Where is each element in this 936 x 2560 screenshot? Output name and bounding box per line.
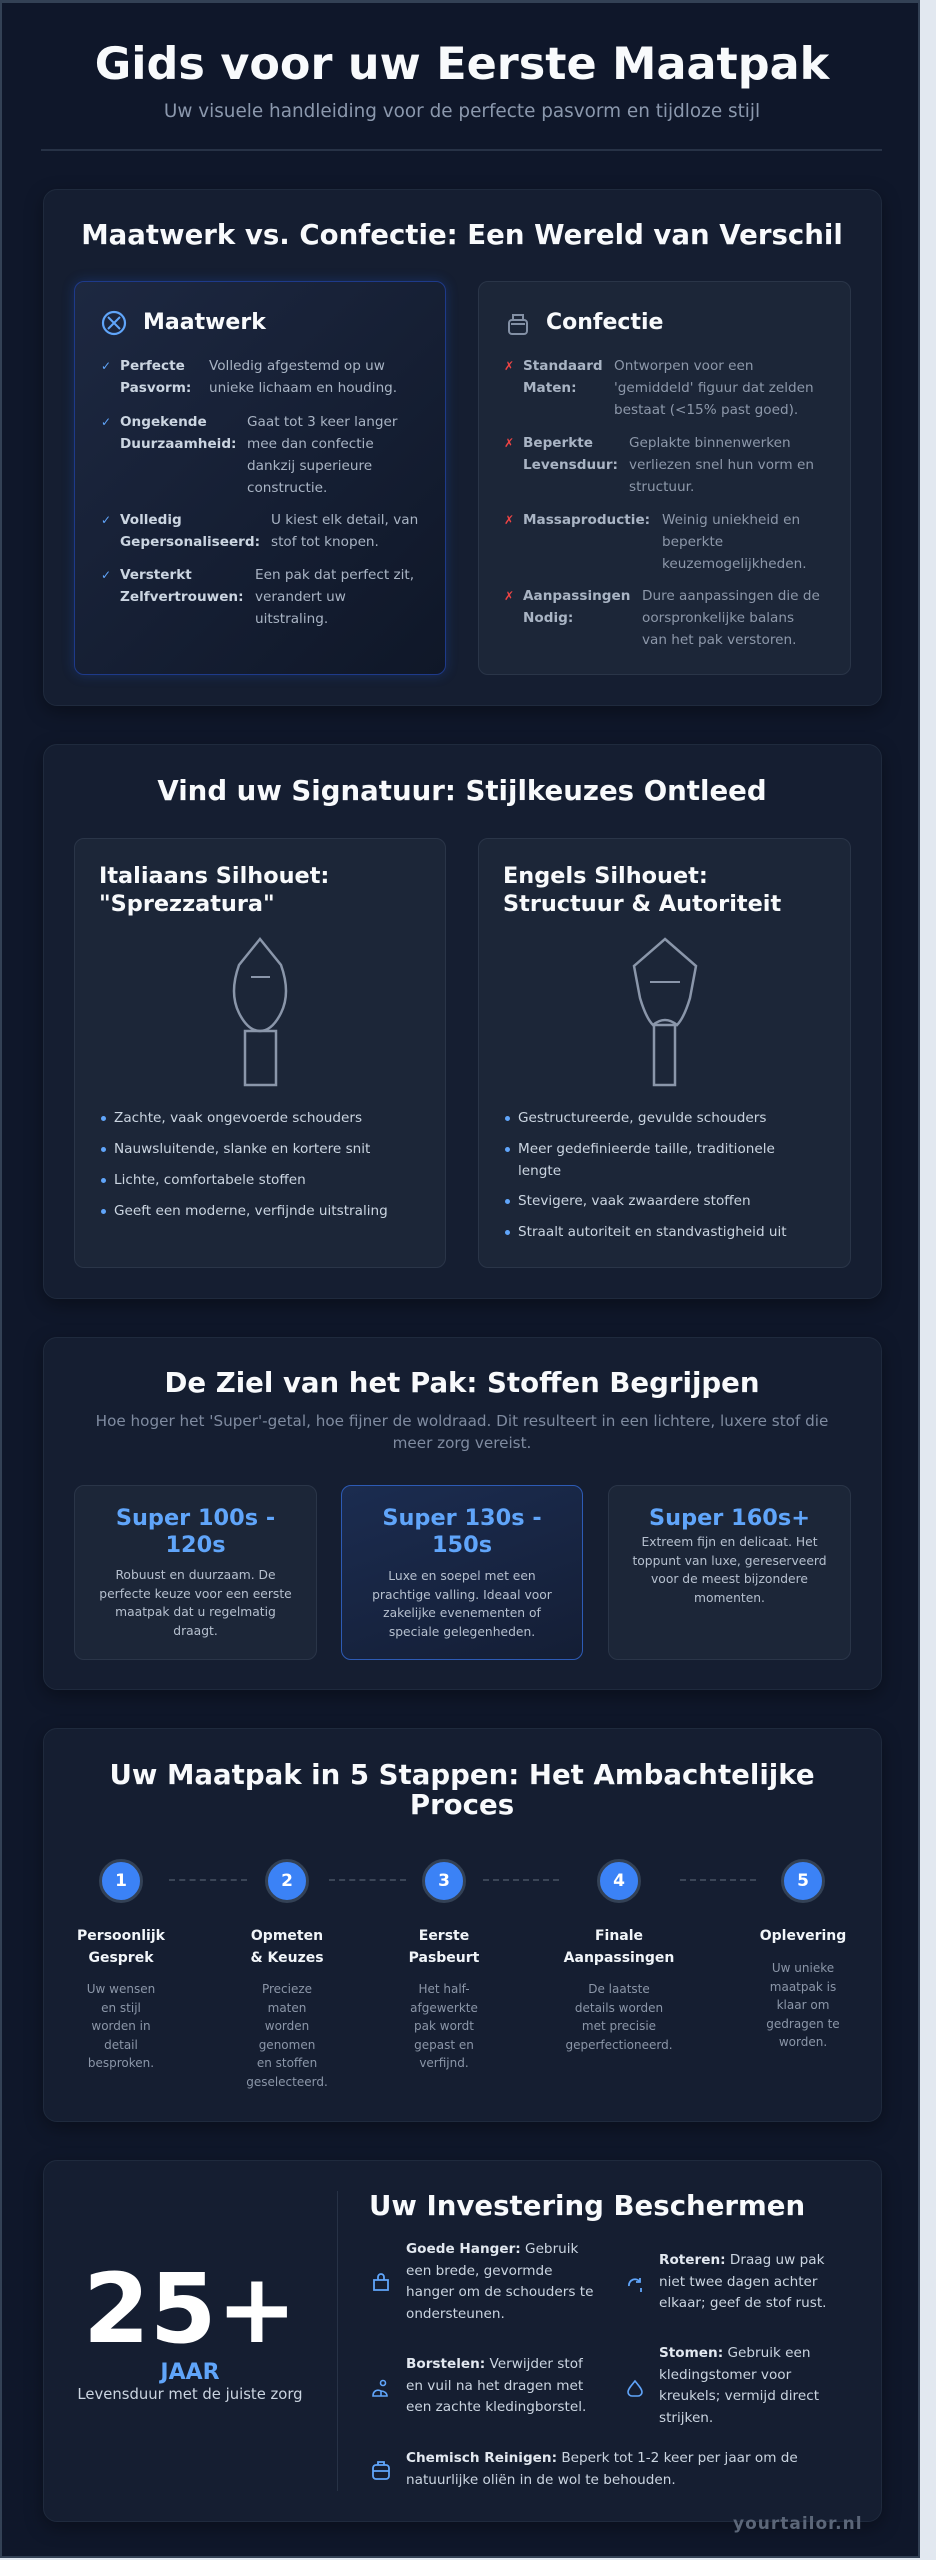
step 5: worden. xyxy=(779,2035,827,2049)
step 2: worden xyxy=(265,2019,309,2033)
card: super 100s-120s: 120s xyxy=(165,1532,226,1558)
card: super 100s-120s: maatpak dat u regelmatig xyxy=(115,1605,276,1619)
list: italiaans traits: Nauwsluitende, slanke en kortere snit xyxy=(114,1141,370,1157)
step 3: verfijnd. xyxy=(419,2056,469,2070)
list: confectie drawbacks: Standaard xyxy=(523,358,603,374)
list: maatwerk benefits: Pasvorm: xyxy=(120,380,191,396)
card: super 130s-150s (highlighted): Super 130s - xyxy=(382,1505,542,1531)
heading: 5 stappen: Uw Maatpak in 5 Stappen: Het Ambachtelijke xyxy=(109,1758,815,1791)
card: super 160s+: toppunt van luxe, gereserveerd xyxy=(632,1554,827,1568)
care: stomen: kledingstomer voor xyxy=(659,2366,791,2382)
care: goede hanger: ondersteunen. xyxy=(406,2306,505,2322)
list: engels traits: lengte xyxy=(518,1163,561,1179)
step 5: 5 xyxy=(797,1871,809,1891)
step 1: detail xyxy=(104,2038,138,2052)
list: confectie drawbacks: keuzemogelijkheden. xyxy=(662,556,807,572)
list: confectie drawbacks: Aanpassingen xyxy=(523,588,630,604)
step 3 xyxy=(409,1859,479,2070)
list: maatwerk benefits: Perfecte xyxy=(120,358,185,374)
icon: confectie box xyxy=(508,314,528,335)
care: roteren: Roteren: Draag uw pak xyxy=(659,2252,824,2268)
card heading: confectie: Confectie xyxy=(546,310,663,335)
icon: needle circle xyxy=(102,310,126,336)
card: super 160s+: momenten. xyxy=(694,1590,765,1604)
step 5 xyxy=(760,1859,846,2049)
list: maatwerk benefits: Duurzaamheid: xyxy=(120,436,236,452)
list: maatwerk benefits: U kiest elk detail, van xyxy=(271,512,418,528)
list: maatwerk benefits: Ongekende xyxy=(120,414,207,430)
step 3: 3 xyxy=(438,1871,450,1891)
card: super 100s-120s xyxy=(74,1485,317,1660)
list: confectie drawbacks: ✗ xyxy=(504,513,514,527)
care: goede hanger: een brede, gevormde xyxy=(406,2262,553,2278)
list: confectie drawbacks: oorspronkelijke balans xyxy=(642,610,794,626)
care: stomen: strijken. xyxy=(659,2410,713,2426)
step 5: Oplevering xyxy=(760,1928,846,1944)
list: maatwerk benefits: ✓ xyxy=(101,415,111,429)
list: confectie drawbacks: verliezen snel hun vorm en xyxy=(629,457,814,473)
list: confectie drawbacks: van het pak verstoren. xyxy=(642,632,796,648)
care: chemisch reinigen: Chemisch Reinigen: Beperk tot 1-2 keer per jaar om de xyxy=(406,2450,798,2466)
step 4: 4 xyxy=(613,1871,625,1891)
list: engels traits: Straalt autoriteit en standvastigheid uit xyxy=(518,1224,787,1240)
list: confectie drawbacks: Beperkte xyxy=(523,435,593,451)
list: maatwerk benefits: Volledig xyxy=(120,512,182,528)
card heading: maatwerk: Maatwerk xyxy=(143,310,266,335)
list: maatwerk benefits: ✓ xyxy=(101,359,111,373)
list: maatwerk benefits: Zelfvertrouwen: xyxy=(120,589,244,605)
text: stoffen intro xyxy=(96,1412,828,1452)
panel: investering beschermen xyxy=(43,2160,882,2522)
step 4: geperfectioneerd. xyxy=(565,2038,673,2052)
step 1: besproken. xyxy=(88,2056,154,2070)
step 3: Pasbeurt xyxy=(409,1950,479,1966)
step 1: 1 xyxy=(115,1871,127,1891)
step 1 xyxy=(77,1859,166,2070)
footer brand: yourtailor.nl xyxy=(733,2514,863,2534)
list: confectie drawbacks: Dure aanpassingen die de xyxy=(642,588,820,604)
card heading: engels xyxy=(503,863,781,917)
list: confectie drawbacks: ✗ xyxy=(504,359,514,373)
icon: rotate xyxy=(628,2278,642,2292)
title: Gids voor uw Eerste Maatpak xyxy=(95,39,829,90)
list: maatwerk benefits: dankzij superieure xyxy=(247,458,372,474)
step 3: Eerste xyxy=(419,1928,469,1944)
list: maatwerk benefits: Volledig afgestemd op uw xyxy=(209,358,385,374)
step 1: Gesprek xyxy=(88,1950,154,1966)
list: confectie drawbacks: Levensduur: xyxy=(523,457,618,473)
card heading: engels: Engels Silhouet: xyxy=(503,863,708,889)
card: super 130s-150s (highlighted): 150s xyxy=(432,1532,492,1558)
step 1: worden in xyxy=(91,2019,151,2033)
list: maatwerk benefits: ✓ xyxy=(101,568,111,582)
care: stomen: kreukels; vermijd direct xyxy=(659,2388,819,2404)
card: super 160s+ xyxy=(608,1485,851,1660)
list: maatwerk benefits xyxy=(101,358,418,627)
step 1: Uw wensen xyxy=(87,1982,155,1996)
list: confectie drawbacks: Weinig uniekheid en xyxy=(662,512,800,528)
card: maatwerk xyxy=(74,281,446,675)
icon: brush xyxy=(372,2380,388,2397)
list: maatwerk benefits: mee dan confectie xyxy=(247,436,374,452)
list: confectie drawbacks: Nodig: xyxy=(523,610,573,626)
icon: engels jacket silhouette xyxy=(632,938,698,1086)
list: maatwerk benefits: Gepersonaliseerd: xyxy=(120,534,260,550)
list: italiaans traits: Zachte, vaak ongevoerde schouders xyxy=(114,1110,362,1126)
step 4: Finale xyxy=(595,1928,643,1944)
stat: 25+ jaar: JAAR xyxy=(160,2360,220,2385)
step 5: Uw unieke xyxy=(772,1961,834,1975)
card heading: italiaans: "Sprezzatura" xyxy=(99,891,275,917)
step 3: gepast en xyxy=(414,2038,474,2052)
step 2: genomen xyxy=(259,2038,315,2052)
list: maatwerk benefits: uitstraling. xyxy=(255,611,328,627)
step 2: maten xyxy=(268,2000,306,2014)
card: super 130s-150s (highlighted): speciale gelegenheden. xyxy=(389,1624,535,1638)
list: engels traits: Gestructureerde, gevulde schouders xyxy=(518,1110,766,1126)
card: super 160s+: voor de meest bijzondere xyxy=(651,1572,808,1586)
list: italiaans traits: Lichte, comfortabele stoffen xyxy=(114,1172,306,1188)
step 5: gedragen te xyxy=(766,2016,840,2030)
card: engels silhouet xyxy=(478,838,851,1268)
step 2: Precieze xyxy=(262,1982,312,1996)
care: goede hanger: hanger om de schouders te xyxy=(406,2284,593,2300)
step 2: & Keuzes xyxy=(250,1950,324,1966)
list: confectie drawbacks: Maten: xyxy=(523,380,577,396)
care: roteren xyxy=(628,2252,826,2311)
care: roteren: niet twee dagen achter xyxy=(659,2274,818,2290)
list: confectie drawbacks: ✗ xyxy=(504,436,514,450)
list: confectie drawbacks: Massaproductie: xyxy=(523,512,650,528)
step 1: en stijl xyxy=(101,2000,141,2014)
care: borstelen xyxy=(372,2356,586,2415)
card: super 130s-150s (highlighted): zakelijke evenementen of xyxy=(383,1606,541,1620)
icon: italiaans jacket silhouette xyxy=(232,937,288,1086)
icon: bag xyxy=(372,2461,390,2480)
subtitle: Uw visuele handleiding voor de perfecte pasvorm en tijdloze stijl xyxy=(164,101,760,122)
list: confectie drawbacks: ✗ xyxy=(504,589,514,603)
card: super 160s+: Super 160s+ xyxy=(649,1505,810,1531)
list: maatwerk benefits: verandert uw xyxy=(255,589,346,605)
step 2: 2 xyxy=(281,1871,293,1891)
panel: stoffen xyxy=(43,1337,882,1690)
list: confectie drawbacks: bestaat (<15% past goed). xyxy=(614,402,798,418)
list: engels traits xyxy=(505,1110,787,1240)
step 2 xyxy=(246,1859,328,2088)
text: stoffen intro: Hoe hoger het 'Super'-getal, hoe fijner de woldraad. Dit resulteert in een lichtere, luxere stof die xyxy=(96,1412,828,1430)
card: super 100s-120s: draagt. xyxy=(173,1624,218,1638)
text: stoffen intro: meer zorg vereist. xyxy=(393,1434,531,1452)
care: goede hanger xyxy=(373,2241,593,2322)
card: super 100s-120s: Robuust en duurzaam. De xyxy=(115,1568,276,1582)
stat: 25+ jaar: 25+ xyxy=(83,2253,297,2365)
step 4: details worden xyxy=(575,2000,663,2014)
care: roteren: elkaar; geef de stof rust. xyxy=(659,2295,826,2311)
card: super 130s-150s (highlighted) xyxy=(341,1485,583,1660)
stat: 25+ jaar: Levensduur met de juiste zorg xyxy=(77,2386,303,2403)
list: maatwerk benefits: constructie. xyxy=(247,480,327,496)
list: maatwerk benefits: stof tot knopen. xyxy=(271,534,379,550)
step 4: met precisie xyxy=(582,2019,656,2033)
list: maatwerk benefits: Versterkt xyxy=(120,567,192,583)
list: maatwerk benefits: unieke lichaam en houding. xyxy=(209,380,397,396)
card heading: italiaans: Italiaans Silhouet: xyxy=(99,863,329,889)
card heading: engels: Structuur & Autoriteit xyxy=(503,891,781,917)
icon: hanger xyxy=(373,2273,389,2291)
care: borstelen: een zachte kledingborstel. xyxy=(406,2399,586,2415)
list: confectie drawbacks: structuur. xyxy=(629,479,694,495)
care: stomen xyxy=(627,2345,819,2426)
list: italiaans traits xyxy=(101,1110,388,1219)
card: confectie xyxy=(478,281,851,675)
step 3: Het half- xyxy=(418,1982,470,1996)
card: super 100s-120s: Super 100s - xyxy=(116,1505,275,1531)
icon: steam drop xyxy=(627,2380,643,2397)
step 2: en stoffen xyxy=(257,2056,317,2070)
list: confectie drawbacks: Geplakte binnenwerken xyxy=(629,435,791,451)
care: borstelen: Borstelen: Verwijder stof xyxy=(406,2356,583,2372)
heading: stoffen: De Ziel van het Pak: Stoffen Begrijpen xyxy=(164,1366,760,1399)
step 2: Opmeten xyxy=(251,1928,323,1944)
step 1: Persoonlijk xyxy=(77,1928,165,1944)
panel: 5 stappen xyxy=(43,1728,882,2122)
step 4: De laatste xyxy=(588,1982,650,1996)
panel: stijlkeuzes xyxy=(43,744,882,1299)
list: confectie drawbacks: Ontworpen voor een xyxy=(614,358,754,374)
list: maatwerk benefits: Gaat tot 3 keer langer xyxy=(247,414,397,430)
heading: stijlkeuzes: Vind uw Signatuur: Stijlkeuzes Ontleed xyxy=(157,774,767,807)
list: maatwerk benefits: Een pak dat perfect zit, xyxy=(255,567,414,583)
list: confectie drawbacks xyxy=(504,358,820,648)
list: maatwerk benefits: ✓ xyxy=(101,513,111,527)
step 3: afgewerkte xyxy=(410,2000,478,2014)
heading: 5 stappen: Proces xyxy=(410,1788,514,1821)
card: super 100s-120s: perfecte keuze voor een eerste xyxy=(99,1586,292,1600)
list: confectie drawbacks: 'gemiddeld' figuur dat zelden xyxy=(614,380,814,396)
care: borstelen: en vuil na het dragen met xyxy=(406,2378,583,2394)
card heading: italiaans xyxy=(99,863,329,917)
card: super 130s-150s (highlighted): Luxe en soepel met een xyxy=(388,1569,536,1583)
heading: investering beschermen: Uw Investering Beschermen xyxy=(369,2189,805,2222)
card: super 130s-150s (highlighted): prachtige valling. Ideaal voor xyxy=(372,1588,552,1602)
step 5: maatpak is xyxy=(770,1980,836,1994)
card: super 160s+: Extreem fijn en delicaat. Het xyxy=(641,1535,818,1549)
step 4 xyxy=(564,1859,674,2052)
heading: 5 stappen xyxy=(109,1758,815,1821)
care: chemisch reinigen: natuurlijke oliën in de wol te behouden. xyxy=(406,2472,676,2488)
heading: maatwerk vs confectie: Maatwerk vs. Confectie: Een Wereld van Verschil xyxy=(81,218,843,251)
card: italiaans silhouet xyxy=(74,838,446,1268)
list: engels traits: Meer gedefinieerde taille, traditionele xyxy=(518,1141,775,1157)
step 3: pak wordt xyxy=(414,2019,474,2033)
step 5: klaar om xyxy=(777,1998,829,2012)
step 4: Aanpassingen xyxy=(564,1950,674,1966)
step 2: geselecteerd. xyxy=(246,2074,328,2088)
list: italiaans traits: Geeft een moderne, verfijnde uitstraling xyxy=(114,1203,388,1219)
list: engels traits: Stevigere, vaak zwaardere stoffen xyxy=(518,1193,751,1209)
care: stomen: Stomen: Gebruik een xyxy=(659,2345,811,2361)
care: goede hanger: Goede Hanger: Gebruik xyxy=(406,2241,578,2257)
panel: maatwerk vs confectie xyxy=(43,189,882,706)
list: confectie drawbacks: beperkte xyxy=(662,534,723,550)
care: chemisch reinigen xyxy=(372,2450,798,2488)
